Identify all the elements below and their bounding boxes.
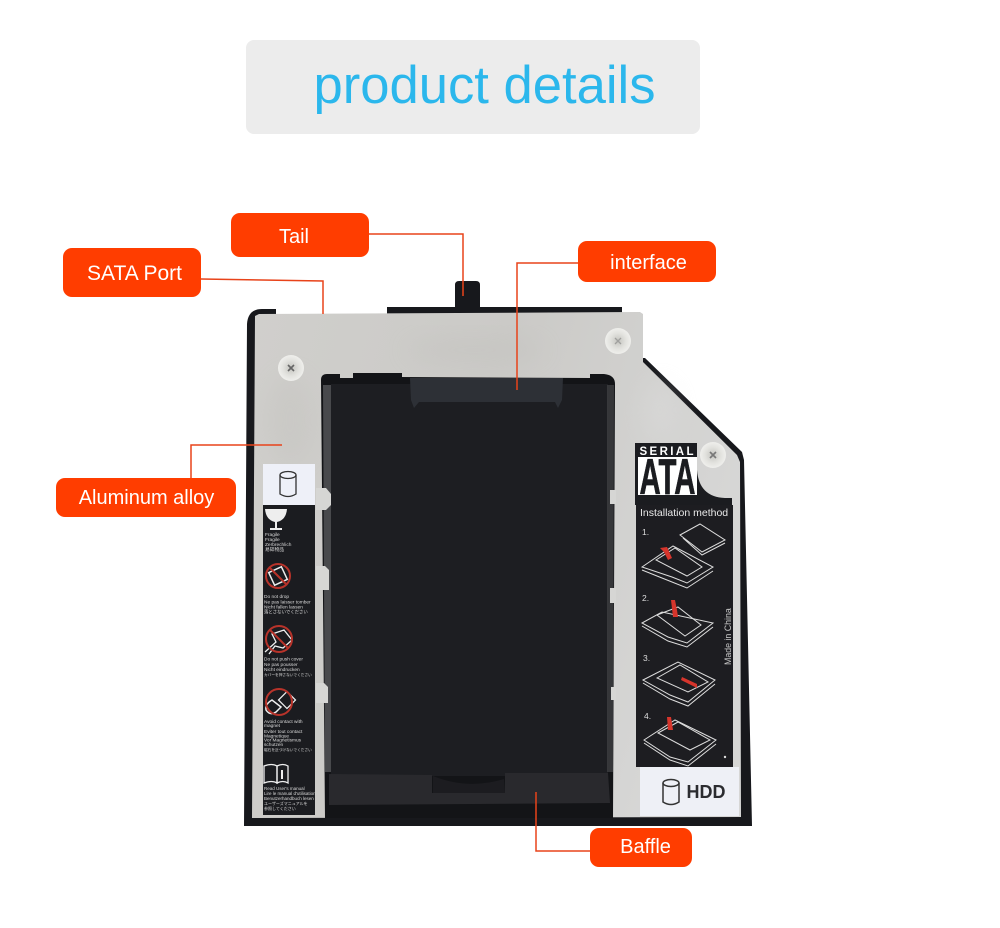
- fragile text: 易碎物品: [265, 546, 284, 553]
- icon: do not push: [265, 626, 292, 654]
- step 3: 3.: [643, 653, 650, 663]
- HDD cylinder panel: [263, 464, 315, 505]
- black warning panel: [263, 505, 315, 815]
- right installation label: [635, 443, 739, 816]
- screw right: [700, 442, 726, 468]
- HDD panel: HDD: [686, 782, 726, 802]
- step 2: [642, 593, 713, 647]
- do not drop text: Nicht fallen lassen: [264, 604, 303, 610]
- do not push text: Do not push cover: [264, 656, 303, 662]
- do not drop text: 落とさないでください: [264, 608, 308, 616]
- do not push text: [264, 656, 312, 677]
- screw top right: [605, 328, 631, 354]
- icon: manual book: [264, 764, 288, 783]
- leader line: Aluminum alloy: [191, 445, 282, 478]
- leader line: Tail: [369, 234, 463, 296]
- icon: fragile glass: [265, 509, 287, 530]
- right silver clips: [610, 490, 616, 700]
- avoid magnet text: [264, 719, 312, 752]
- callout: Aluminum alloy: [56, 478, 236, 517]
- callout: Aluminum alloy: Aluminum alloy: [79, 487, 214, 509]
- do not push text: Nicht eindrucken: [264, 667, 300, 673]
- icon: avoid magnet: [266, 689, 295, 715]
- metal surface blotches: [268, 338, 678, 465]
- avoid magnet text: Eviter tout contact: [264, 729, 303, 735]
- SATA connector: [410, 378, 563, 408]
- manual text: ユーザーズマニュアルを: [264, 800, 308, 806]
- instructions panel: [636, 505, 733, 767]
- manual text: 参照してください: [264, 805, 296, 811]
- right window rail: [607, 385, 614, 772]
- title banner: [246, 40, 700, 134]
- product: hard drive caddy: [244, 281, 752, 826]
- avoid magnet text: 磁石を近づけないでください: [264, 747, 312, 752]
- manual text: Read User's manual: [264, 786, 305, 791]
- leader line: SATA Port: [201, 279, 323, 314]
- hard drive window: [321, 373, 615, 818]
- leader line: Baffle: [536, 792, 590, 851]
- step 4: 4.: [644, 711, 651, 721]
- callout: SATA Port: [63, 248, 201, 297]
- avoid magnet text: Avoid contact with: [264, 719, 303, 725]
- do not drop text: [264, 594, 311, 616]
- step 4: [644, 711, 726, 766]
- inner window panel: [331, 384, 608, 776]
- HDD panel: [640, 767, 739, 816]
- avoid magnet text: magnet: [264, 723, 281, 729]
- callout: interface: [578, 241, 716, 282]
- fragile text: Fragile: [265, 532, 280, 538]
- baffle: [329, 773, 610, 805]
- made in China: Made in China: [723, 608, 733, 665]
- black caddy body: [244, 281, 752, 826]
- fragile text: [265, 532, 292, 553]
- leader line: interface: [517, 263, 578, 390]
- do not push text: Ne pas pousser: [264, 662, 298, 668]
- step 3: [643, 653, 715, 706]
- Serial ATA logo: SERIAL: [640, 446, 694, 458]
- fragile text: Fragile: [265, 537, 280, 543]
- callout: Baffle: Baffle: [620, 836, 671, 858]
- callout: SATA Port: SATA Port: [87, 262, 182, 285]
- icon: do not drop: [266, 564, 290, 588]
- do not drop text: Do not drop: [264, 594, 289, 600]
- callout: interface: interface: [610, 252, 687, 274]
- avoid magnet text: Magnetique: [264, 734, 289, 740]
- do not push text: カバーを押さないでください: [264, 672, 312, 677]
- step 2: 2.: [642, 593, 649, 603]
- left window rail: [323, 385, 331, 772]
- step 1: [642, 524, 725, 588]
- callout: Tail: [231, 213, 369, 257]
- manual text: [264, 786, 316, 811]
- left warning label: [263, 464, 316, 815]
- avoid magnet text: schutzen: [264, 742, 284, 748]
- callout: Baffle: [590, 828, 692, 867]
- step 1: 1.: [642, 527, 649, 537]
- fragile text: Zerbrechlich: [265, 542, 292, 548]
- do not drop text: Ne pas laisser tomber: [264, 600, 311, 606]
- manual text: Lire le manual d'utilisation: [264, 791, 316, 796]
- title text: product details: [313, 56, 656, 115]
- left silver clips: [316, 488, 331, 703]
- silver plate: [252, 312, 741, 818]
- Serial ATA logo: ATA: [640, 449, 696, 505]
- callout: Tail: Tail: [279, 226, 309, 248]
- screw top left: [278, 355, 304, 381]
- avoid magnet text: Vor Magnetismus: [264, 738, 302, 744]
- baffle notch: [433, 776, 505, 793]
- manual text: Benutzerhandbuch lesen: [264, 796, 314, 801]
- installation heading: Installation method: [640, 507, 728, 519]
